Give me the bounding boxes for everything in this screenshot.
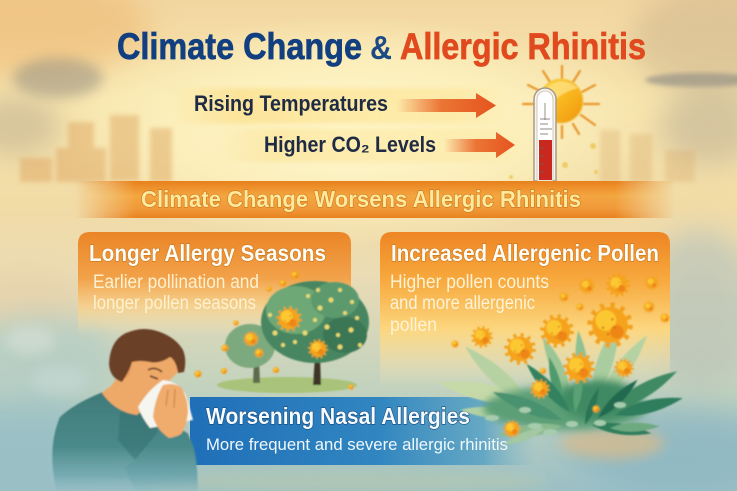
title: &: [370, 29, 392, 66]
hands: [153, 384, 188, 438]
hair: [109, 329, 185, 382]
title: [117, 26, 646, 67]
city skyline: right: [600, 130, 695, 182]
panel: increased allergenic pollen: [380, 232, 670, 388]
tissue: [138, 380, 193, 428]
ear: [119, 358, 131, 378]
title: Climate Change: [117, 26, 362, 67]
panel: longer allergy seasons: Longer Allergy Seasons: [89, 240, 326, 266]
icon: thermometer: [534, 88, 556, 181]
sweater: [52, 392, 198, 491]
illustration: pollen plant: [435, 276, 684, 449]
sleeve: [125, 433, 198, 491]
panel: longer allergy seasons: [78, 232, 351, 335]
panel: increased allergenic pollen: Increased Allergenic Pollen: [391, 240, 659, 266]
title: Allergic Rhinitis: [400, 26, 646, 67]
city skyline: left: [20, 115, 172, 182]
panel: increased allergenic pollen: and more allergenic: [390, 293, 535, 314]
label: rising temperatures: Rising Temperatures: [194, 91, 388, 116]
panel: longer allergy seasons: longer pollen seasons: [93, 293, 256, 314]
eye: [148, 368, 162, 379]
panel: increased allergenic pollen: Higher pollen counts: [390, 272, 549, 293]
small airborne pollen specks: [509, 143, 598, 179]
neck and face: [102, 345, 178, 415]
highlight strip: higher CO2: [215, 128, 525, 162]
panel: increased allergenic pollen: pollen: [390, 315, 437, 336]
banner: [75, 181, 675, 218]
callout: worsening nasal allergies: [190, 397, 535, 465]
illustration: man sneezing: [52, 329, 198, 491]
panel: longer allergy seasons: Earlier pollination and: [93, 272, 259, 293]
highlight strip: rising temperatures: [170, 88, 510, 124]
arrow: higher CO2: [444, 132, 515, 158]
label: higher CO2: Higher CO₂ Levels: [264, 132, 436, 157]
icon: sun: [523, 66, 599, 138]
arrow: rising temperatures: [397, 93, 496, 118]
illustration: trees: [195, 271, 369, 393]
callout: worsening nasal allergies: More frequent and severe allergic rhinitis: [206, 436, 508, 454]
banner: Climate Change Worsens Allergic Rhinitis: [141, 186, 581, 212]
chest shadow: [118, 412, 158, 460]
callout: worsening nasal allergies: Worsening Nasal Allergies: [206, 403, 470, 429]
